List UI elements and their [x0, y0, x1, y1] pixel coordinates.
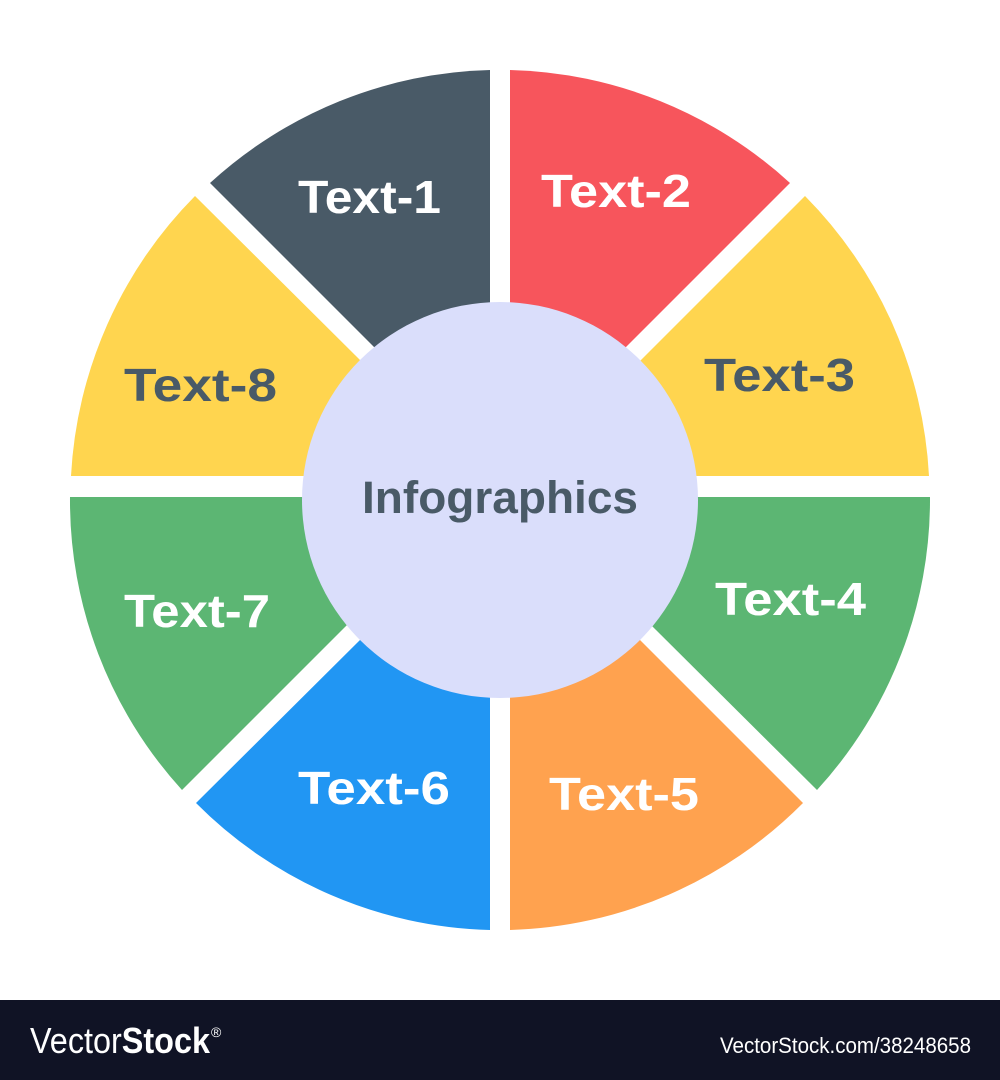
segment: Text-4: Text-4	[715, 573, 866, 625]
segment: Text-3: Text-3	[704, 349, 855, 401]
segment: Text-6: Text-6	[298, 762, 450, 814]
footer logo: VectorStock	[30, 1020, 211, 1061]
center circle: Infographics	[362, 472, 638, 523]
segment: Text-8: Text-8	[124, 359, 277, 411]
segment: Text-1	[210, 70, 490, 463]
segment: Text-5: Text-5	[549, 768, 699, 820]
footer url: VectorStock.com/38248658	[720, 1033, 971, 1058]
footer bar	[0, 1000, 1000, 1080]
center circle	[302, 302, 698, 698]
segment: Text-2: Text-2	[541, 165, 691, 217]
segment: Text-4	[523, 497, 930, 790]
segment: Text-6	[196, 510, 490, 930]
segment: Text-1: Text-1	[298, 171, 441, 223]
segment: Text-2	[510, 70, 790, 463]
registered mark: ®	[211, 1024, 222, 1040]
segment: Text-3	[525, 196, 929, 476]
segment: Text-7: Text-7	[124, 585, 270, 637]
segment: Text-8	[71, 196, 475, 476]
donut wheel	[70, 70, 930, 930]
segment: Text-5	[510, 510, 803, 930]
segment: Text-7	[70, 497, 477, 790]
